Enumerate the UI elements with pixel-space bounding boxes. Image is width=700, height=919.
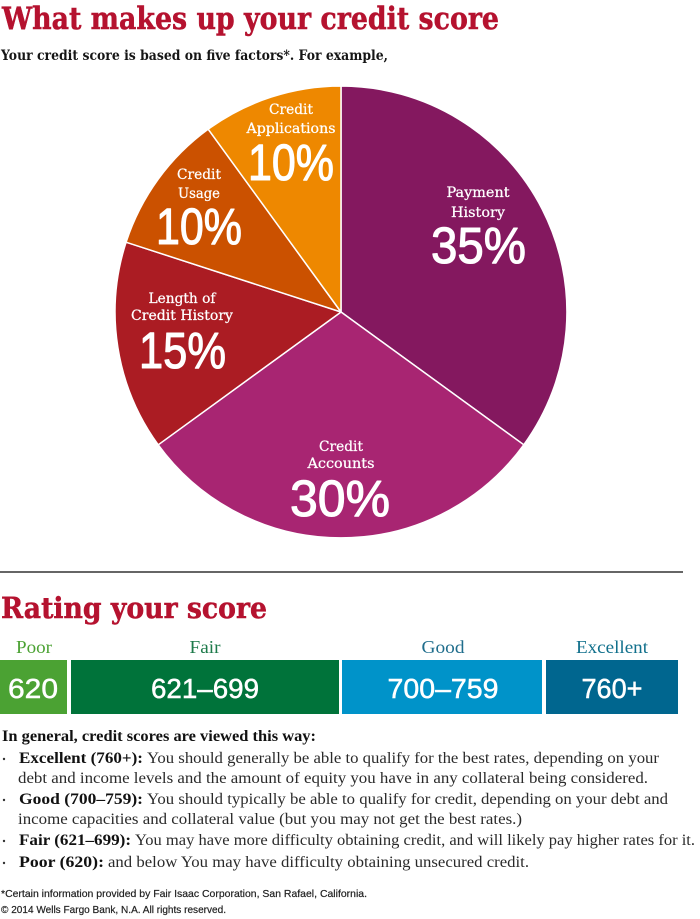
rating: good: 700–759	[388, 673, 498, 704]
footnote: *Certain information provided by Fair Isaac Corporation, San Rafael, California.	[1, 888, 367, 900]
bullet: excellent: You should generally be able to qualify for the best rates, depending on your	[147, 750, 660, 767]
rating: excellent	[546, 637, 678, 714]
slice: credit accounts 30%: Accounts	[306, 456, 375, 472]
slice: credit applications 10%: Credit	[269, 102, 314, 118]
slice: payment history 35%: 35%	[431, 217, 526, 274]
slice: payment history 35%: Payment	[446, 185, 510, 201]
bullet: fair: Fair (621–699):	[19, 832, 131, 849]
rating: fair	[71, 637, 339, 714]
bullet: good: Good (700–759):	[19, 791, 143, 808]
rating scale	[0, 637, 678, 714]
bullet: good	[3, 791, 668, 828]
slice: length of credit history 15%: Credit History	[131, 308, 233, 324]
slice: credit usage 10%: Usage	[178, 186, 220, 202]
slice: credit accounts 30%	[158, 312, 524, 538]
rating: poor: 620	[8, 673, 58, 704]
slice: length of credit history 15%: 15%	[139, 322, 226, 379]
title: What makes up your credit score	[1, 1, 499, 37]
bullet: poor: Poor (620):	[19, 854, 104, 871]
rating: fair: Fair	[190, 637, 221, 657]
slice: credit accounts 30%: 30%	[290, 470, 390, 527]
explanation text	[2, 728, 695, 871]
slice: length of credit history 15%: Length of	[148, 291, 217, 307]
slice: credit usage 10%: 10%	[156, 198, 242, 255]
bullet: good: income capacities and collateral value (but you may not get the best rates.)	[18, 811, 522, 828]
bullet: good: You should typically be able to qualify for credit, depending on your debt and	[147, 791, 668, 808]
rating: poor: Poor	[16, 637, 52, 657]
slice: credit usage 10%	[126, 129, 341, 312]
bullet: excellent	[3, 750, 660, 787]
rating: excellent: Excellent	[576, 637, 648, 657]
rating: excellent: 760+	[582, 673, 642, 704]
rating: poor	[0, 637, 67, 714]
bullet: fair: You may have more difficulty obtaining credit, and will likely pay higher rates for it.	[135, 832, 695, 849]
slice: credit applications 10%	[208, 86, 341, 312]
pie chart	[115, 86, 567, 538]
slice: credit applications 10%: 10%	[248, 134, 334, 191]
copyright: © 2014 Wells Fargo Bank, N.A. All rights reserved.	[1, 904, 226, 916]
heading: rating your score: Rating your score	[1, 591, 267, 625]
slice: length of credit history 15%	[115, 242, 341, 445]
rating: good: Good	[422, 637, 464, 657]
bullet: excellent: Excellent (760+):	[19, 750, 143, 767]
bullet: poor: and below You may have difficulty obtaining unsecured credit.	[108, 854, 529, 871]
bullet: excellent: debt and income levels and the amount of equity you have in any collateral being considered.	[18, 770, 648, 787]
rating: good	[342, 637, 542, 714]
slice: payment history 35%: History	[451, 205, 505, 221]
rating: fair: 621–699	[151, 673, 259, 704]
explanation heading: In general, credit scores are viewed this way:	[2, 728, 316, 745]
slice: payment history 35%	[341, 86, 567, 445]
slice: credit applications 10%: Applications	[245, 121, 336, 137]
slice: credit usage 10%: Credit	[177, 167, 222, 183]
subtitle: Your credit score is based on five factors*. For example,	[0, 48, 388, 64]
slice: credit accounts 30%: Credit	[319, 439, 364, 455]
